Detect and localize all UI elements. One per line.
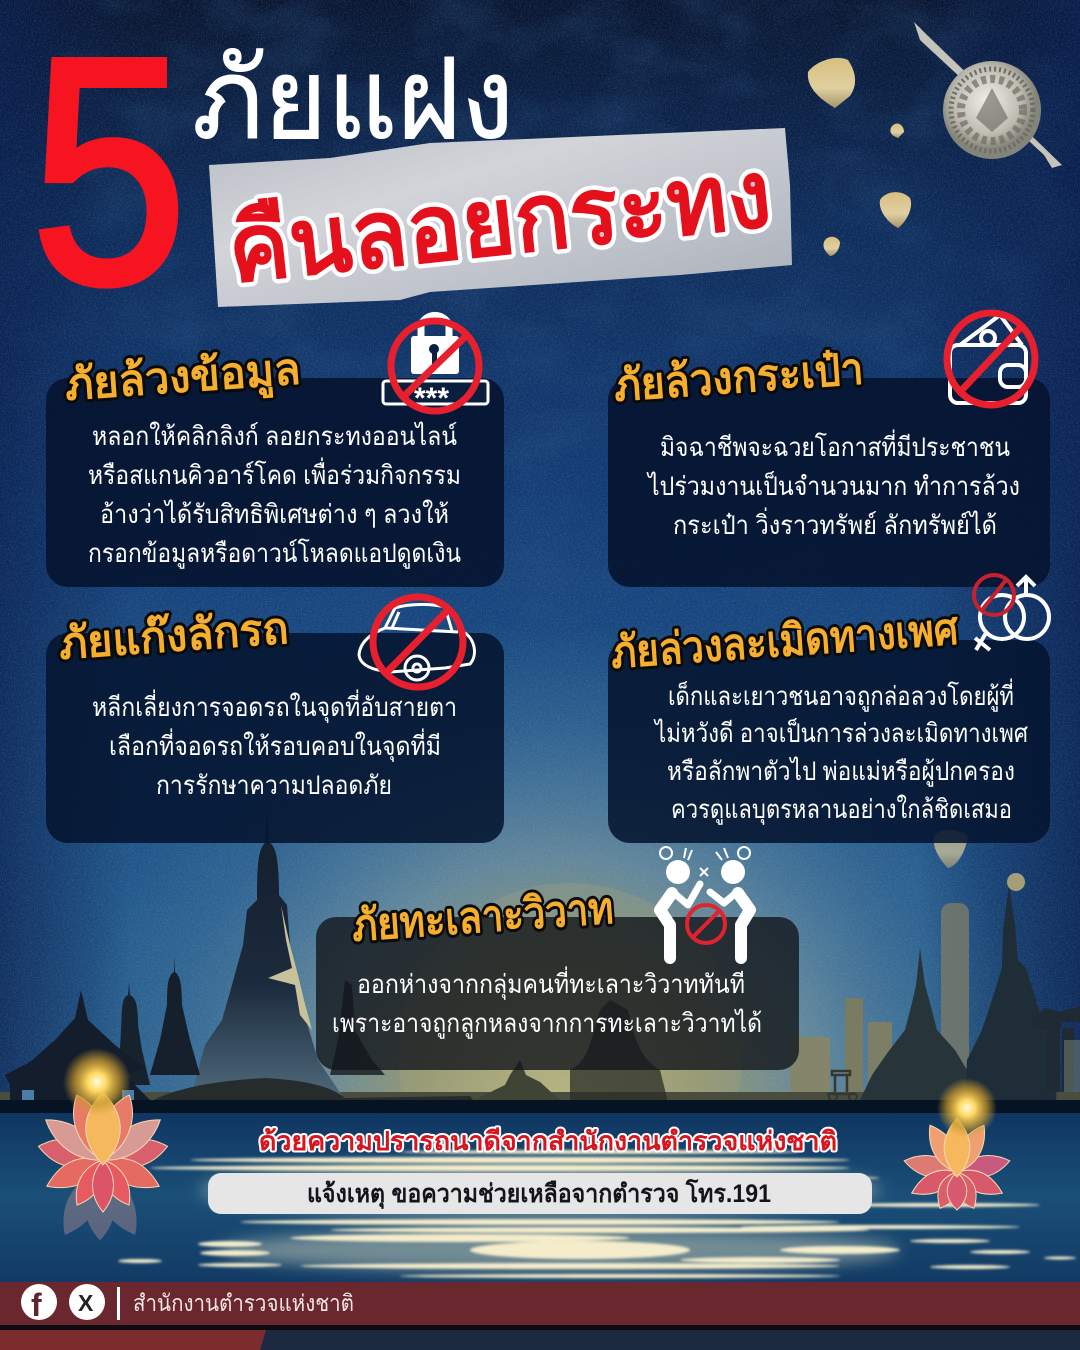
body text: ไม่หวังดี อาจเป็นการล่วงละเมิดทางเพศ bbox=[653, 717, 1028, 748]
body text bbox=[332, 966, 762, 1039]
body text: การรักษาความปลอดภัย bbox=[156, 770, 392, 800]
body text: หรือลักพาตัวไป พ่อแม่หรือผู้ปกครอง bbox=[667, 756, 1015, 787]
hotline pill: แจ้งเหตุ ขอความช่วยเหลือจากตำรวจ โทร.191 bbox=[307, 1178, 771, 1210]
title: ภัยทะเลาะวิวาท bbox=[350, 884, 615, 951]
panel: ภัยแก๊งลักรถ bbox=[46, 597, 504, 843]
body text: หรือสแกนคิวอาร์โคด เพื่อร่วมกิจกรรม bbox=[88, 457, 461, 490]
heading number 5: 5 bbox=[31, 0, 187, 351]
illustration: floating lanterns bbox=[808, 58, 968, 868]
heading: ภัยแฝง: ภัยแฝง bbox=[192, 37, 514, 162]
title: ภัยล่วงละเมิดทางเพศ bbox=[609, 605, 961, 678]
body text: อ้างว่าได้รับสิทธิพิเศษต่าง ๆ ลวงให้ bbox=[100, 499, 449, 529]
icon: facebook bbox=[21, 1284, 57, 1323]
icon: crossed-out car bbox=[359, 597, 474, 687]
body text bbox=[92, 689, 457, 800]
panel: ภัยล้วงกระเป๋า bbox=[608, 313, 1050, 587]
right lotus lantern bbox=[902, 1078, 1012, 1212]
body text: หลีกเลี่ยงการจอดรถในจุดที่อับสายตา bbox=[92, 689, 457, 723]
panel: ภัยล้วงข้อมูล bbox=[46, 315, 504, 587]
icon: crossed-out gender symbols bbox=[974, 575, 1049, 650]
body text: ออกห่างจากกลุ่มคนที่ทะเลาะวิวาททันที bbox=[357, 966, 745, 1000]
illustration: police emblem and baton bbox=[914, 22, 1062, 168]
title: ภัยล้วงกระเป๋า bbox=[612, 345, 865, 411]
heading tape: คืนลอยกระทง: คืนลอยกระทง bbox=[223, 141, 776, 302]
moon bbox=[398, 883, 742, 1227]
icon: two people arguing bbox=[660, 847, 750, 958]
icon: X bbox=[69, 1284, 105, 1320]
icon: facebook: f bbox=[31, 1287, 42, 1323]
icon: crossed-out padlock: *** bbox=[414, 382, 449, 415]
panel: ภัยล่วงละเมิดทางเพศ bbox=[608, 575, 1050, 843]
title: ภัยแก๊งลักรถ bbox=[57, 604, 290, 669]
body text: กระเป๋า วิ่งราวทรัพย์ ลักทรัพย์ได้ bbox=[673, 507, 997, 540]
message: goodwill from police: ด้วยความปรารถนาดีจากสำนักงานตำรวจแห่งชาติ bbox=[259, 1126, 837, 1156]
footer organisation name: สำนักงานตำรวจแห่งชาติ bbox=[133, 1290, 354, 1316]
footer band bbox=[0, 1282, 1080, 1350]
icon: X: X bbox=[78, 1290, 94, 1316]
panel: ภัยทะเลาะวิวาท bbox=[316, 847, 799, 1070]
body text: กรอกข้อมูลหรือดาวน์โหลดแอปดูดเงิน bbox=[88, 538, 461, 569]
dark band above water bbox=[0, 1100, 1080, 1113]
body text: เด็กและเยาวชนอาจถูกล่อลวงโดยผู้ที่ bbox=[668, 678, 1014, 712]
temple skyline silhouettes bbox=[0, 808, 1080, 1104]
body text: ไปร่วมงานเป็นจำนวนมาก ทำการล้วง bbox=[646, 470, 1020, 501]
body text: ควรดูแลบุตรหลานอย่างใกล้ชิดเสมอ bbox=[671, 794, 1012, 825]
body text: เพราะอาจถูกลูกหลงจากการทะเลาะวิวาทได้ bbox=[332, 1008, 762, 1039]
body text: หลอกให้คลิกลิงก์ ลอยกระทงออนไลน์ bbox=[92, 421, 457, 451]
title: ภัยล้วงข้อมูล bbox=[63, 345, 302, 412]
body text bbox=[88, 421, 461, 569]
hotline pill bbox=[208, 1173, 872, 1214]
icon: crossed-out padlock bbox=[383, 315, 488, 415]
body text: เลือกที่จอดรถให้รอบคอบในจุดที่มี bbox=[109, 728, 441, 762]
body text: มิจฉาชีพจะฉวยโอกาสที่มีประชาชน bbox=[660, 429, 1010, 462]
body text bbox=[653, 678, 1028, 825]
icon: crossed-out wallet bbox=[947, 313, 1035, 405]
water bbox=[0, 1110, 1080, 1282]
body text bbox=[646, 429, 1020, 540]
left lotus lantern bbox=[36, 1048, 170, 1242]
